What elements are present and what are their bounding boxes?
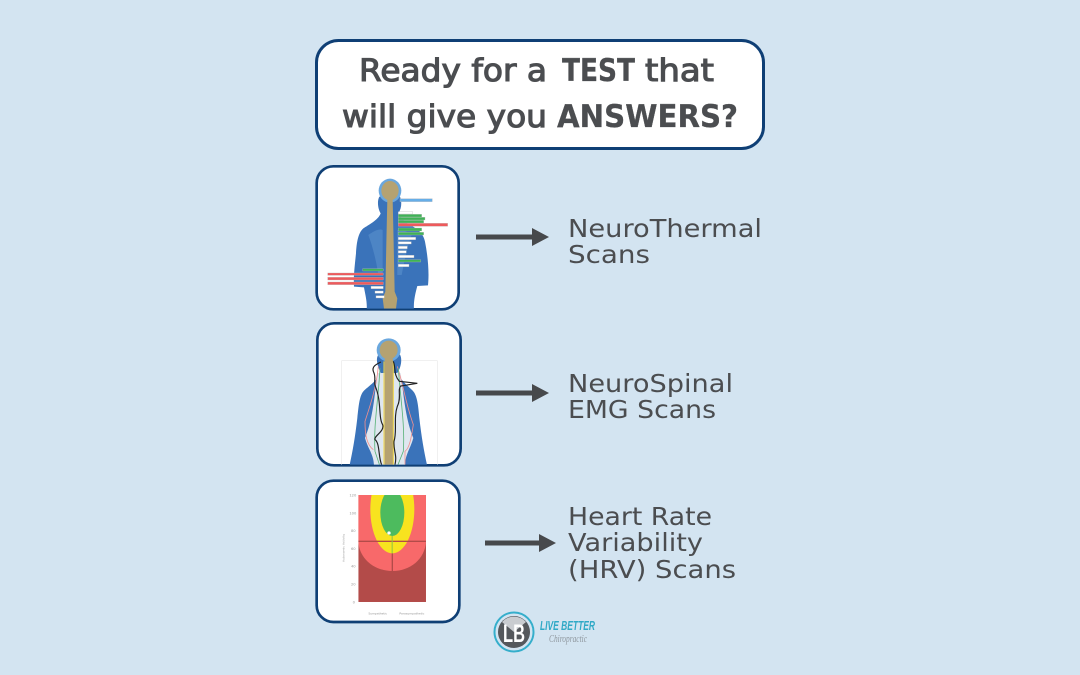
title line 2: will give you — [342, 99, 547, 135]
panel: HRV scan image — [317, 465, 459, 622]
panel: NeuroSpinal EMG scan image — [317, 323, 461, 467]
logo: Live Better Chiropractic — [494, 612, 595, 652]
icon: light back muscle shading — [368, 230, 412, 275]
title line 1: Ready for a — [359, 53, 547, 89]
label: NeuroThermal Scans — [568, 214, 762, 269]
label: NeuroThermal Scans: NeuroThermal — [568, 214, 762, 243]
title line 1: TEST — [562, 53, 635, 89]
chart: axis labels: Parasympathetic — [399, 611, 425, 615]
title line 1: that — [645, 53, 714, 89]
chart: axis labels: 40 — [351, 565, 356, 569]
arrow: NeuroThermal — [476, 228, 549, 246]
chart: axis labels: 60 — [351, 547, 356, 551]
arrow: HRV — [485, 534, 556, 552]
chart: axis labels: 0 — [353, 600, 356, 604]
label: NeuroThermal Scans: Scans — [568, 240, 650, 269]
label: Heart Rate Variability (HRV) Scans: (HRV) Scans — [568, 555, 736, 584]
line chart: EMG traces — [365, 361, 417, 466]
chart: axis labels: Autonomic Activity — [342, 534, 346, 562]
chart: axis labels: 100 — [349, 511, 357, 515]
title line 1 — [359, 53, 714, 89]
icon: spine — [380, 341, 398, 467]
icon: blue torso silhouette — [349, 355, 427, 466]
panel: NeuroThermal scan image — [317, 166, 459, 310]
icon: blue back silhouette — [354, 197, 429, 310]
logo: Live Better Chiropractic: Chiropractic — [549, 633, 587, 645]
icon: spine — [381, 181, 399, 309]
chart: axis labels: Sympathetic — [368, 611, 388, 615]
chart: HRV zones — [358, 495, 426, 602]
chart: axis labels: 20 — [351, 583, 356, 587]
title line 2: ANSWERS? — [557, 99, 738, 135]
label: NeuroSpinal EMG Scans: EMG Scans — [568, 395, 716, 424]
logo: Live Better Chiropractic: LB — [503, 620, 525, 648]
arrow: NeuroSpinal — [476, 384, 549, 402]
label: NeuroSpinal EMG Scans — [568, 369, 733, 424]
chart: axis labels — [342, 494, 425, 615]
title box — [316, 40, 764, 148]
bar chart: thermal readings — [328, 199, 448, 298]
chart: axis labels: 80 — [351, 529, 356, 533]
label: Heart Rate Variability (HRV) Scans: Variability — [568, 528, 703, 557]
label: Heart Rate Variability (HRV) Scans — [568, 502, 736, 584]
label: Heart Rate Variability (HRV) Scans: Heart Rate — [568, 502, 712, 531]
logo: Live Better Chiropractic: LIVE BETTER — [540, 619, 595, 633]
chart: axis labels: 120 — [349, 494, 357, 498]
icon: pale EMG area — [365, 373, 413, 466]
label: NeuroSpinal EMG Scans: NeuroSpinal — [568, 369, 733, 398]
title line 2 — [342, 99, 738, 135]
